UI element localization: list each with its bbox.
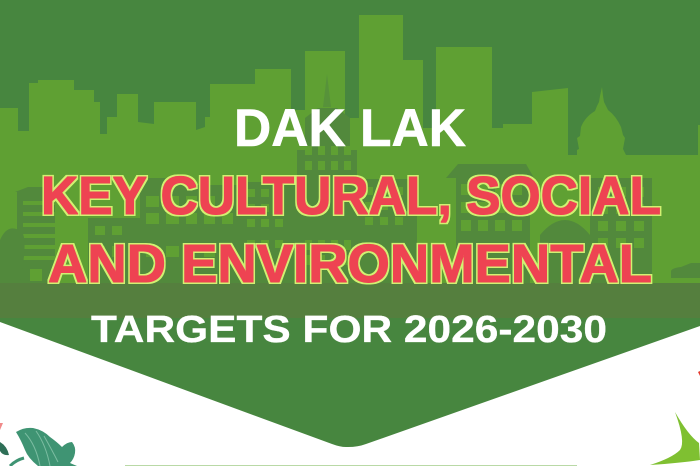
building: right block: [590, 178, 652, 283]
city skyline silhouette: [0, 15, 700, 283]
heading: key cultural, social: KEY CULTURAL, SOCIAL: [41, 166, 661, 226]
olive ground band: [0, 280, 700, 318]
subheading: targets: TARGETS FOR 2026-2030: [91, 309, 607, 351]
building: left block: [30, 178, 240, 283]
dome behind title: [540, 220, 590, 283]
foreground buildings: [0, 74, 700, 283]
building: far left: [15, 187, 55, 283]
icon: right leaf: [650, 371, 700, 465]
building: roofed tower: [446, 164, 534, 283]
spire: [323, 74, 331, 107]
icon: car: [671, 263, 700, 278]
icon: left leaves: [0, 423, 77, 466]
bottom panel edge: [125, 465, 577, 466]
building: centre right block: [240, 182, 297, 283]
heading: and environmental: AND ENVIRONMENTAL: [48, 234, 652, 294]
building: low block: [357, 179, 417, 283]
building: central tower: [297, 108, 357, 283]
heading: DAK LAK: DAK LAK: [234, 99, 466, 158]
dome left: [0, 228, 25, 283]
